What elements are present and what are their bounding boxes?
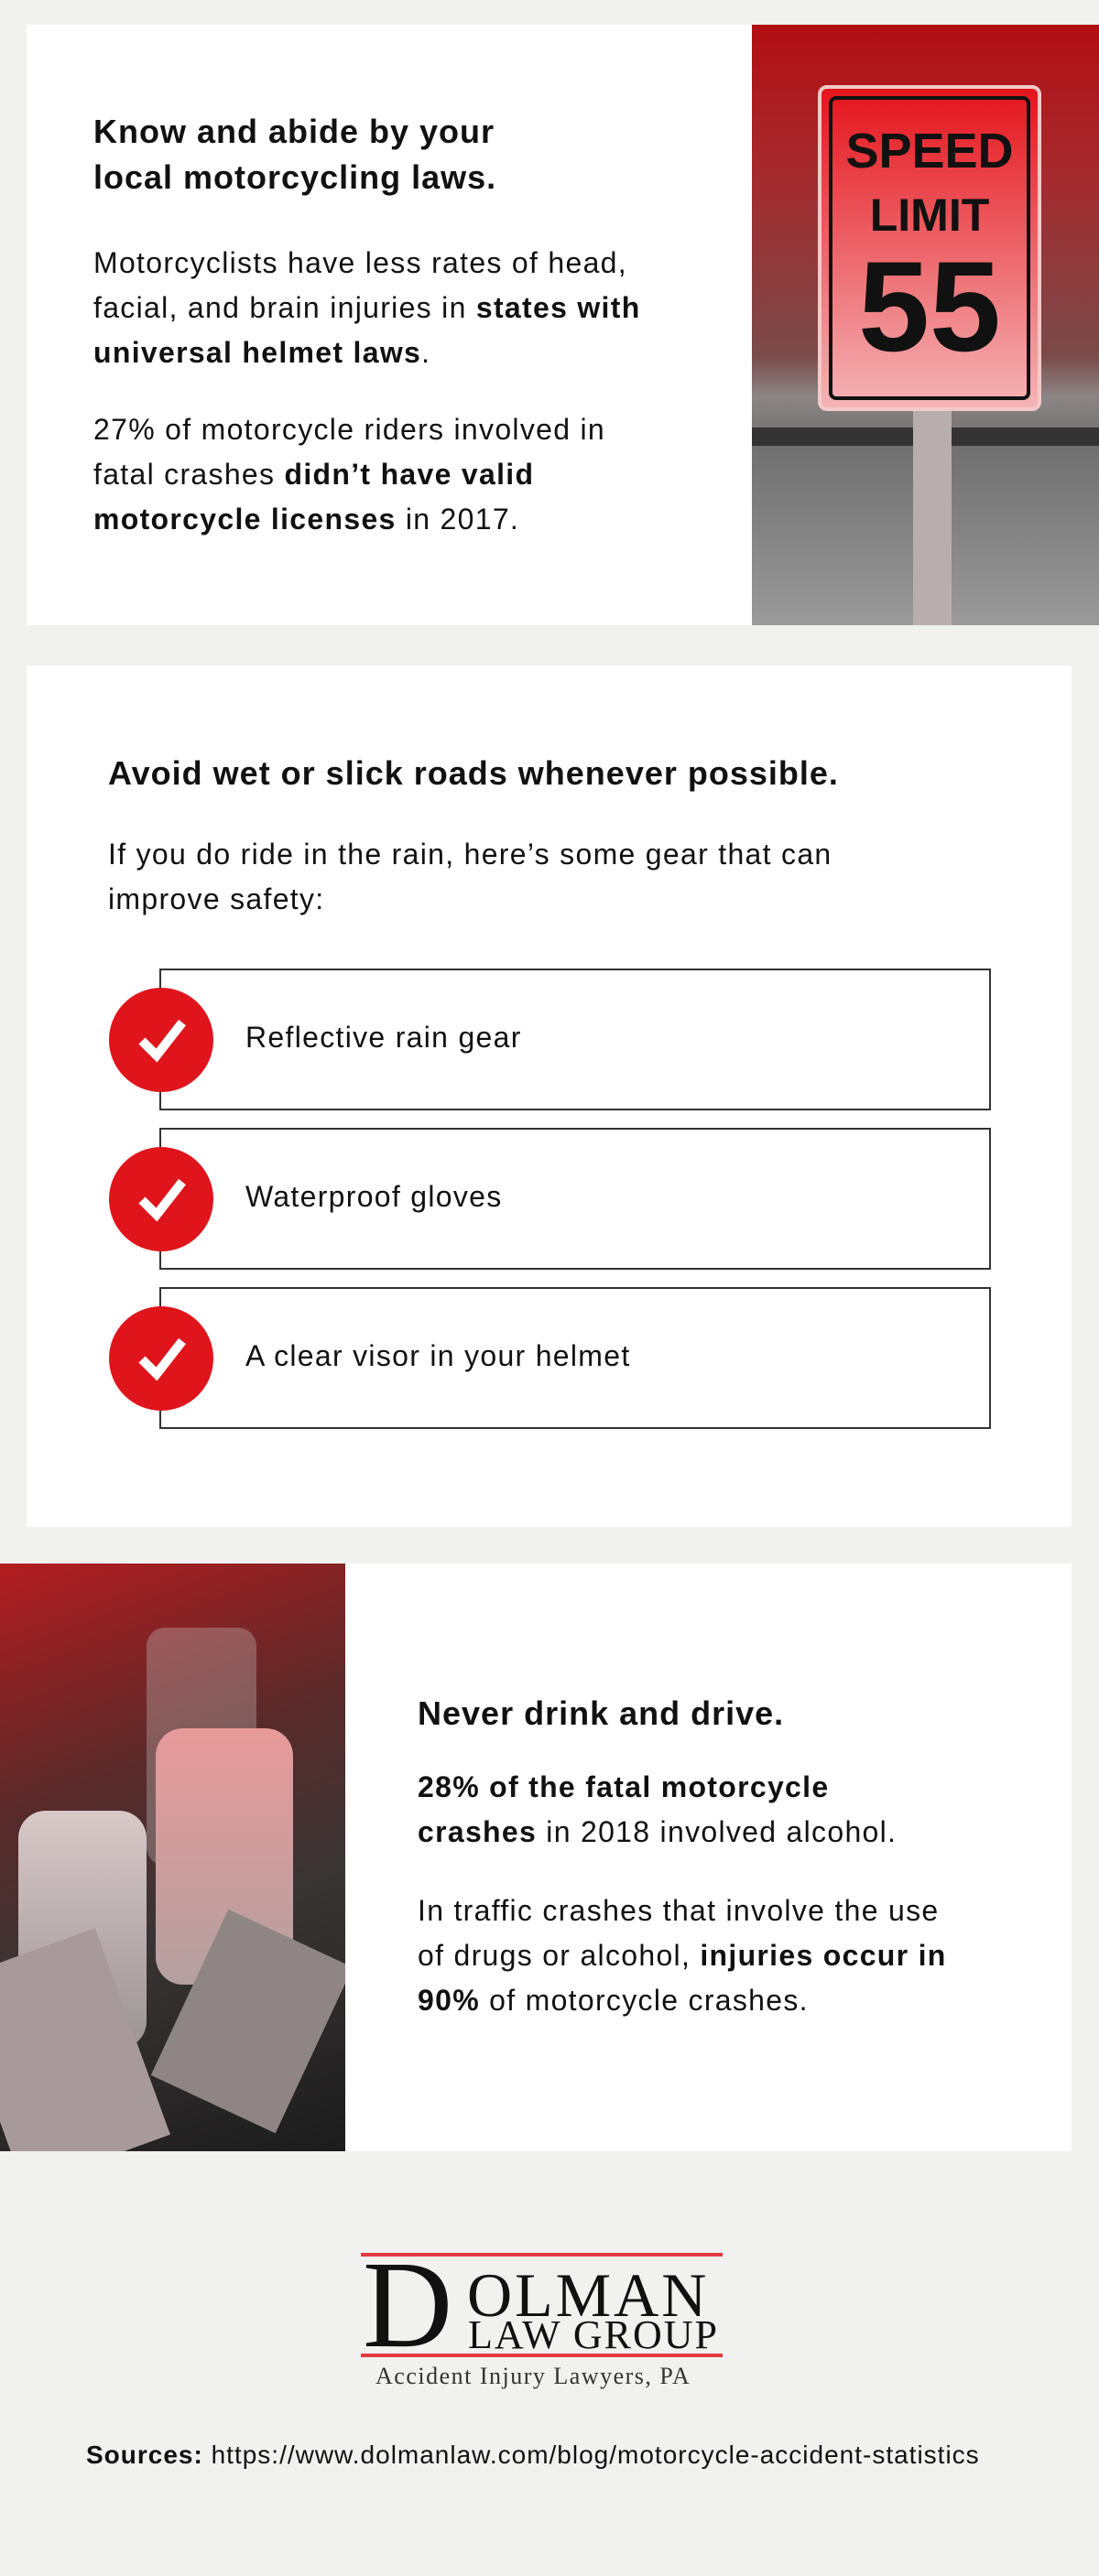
text: rain gear intro: If you do ride in the rain, here’s some gear that can [108,838,832,871]
icon: check 3 [109,1306,213,1411]
panel: drink and drive [0,1564,1072,2151]
image: speed limit sign [752,25,1099,625]
text: helmet laws: universal helmet laws. [93,336,430,369]
item: reflective rain gear: Reflective rain gear [245,1021,522,1054]
panel: local laws [27,25,1099,625]
image: speed limit sign: 55 [858,234,1001,378]
icon: check 1 [109,988,213,1092]
item: clear visor: A clear visor in your helmet [245,1339,631,1372]
heading: know laws: Know and abide by your [93,113,495,150]
text: licenses: fatal crashes didn’t have valid [93,458,534,491]
item: clear visor [159,1287,991,1429]
text: helmet laws: Motorcyclists have less rates of head, [93,246,627,279]
heading: avoid wet roads: Avoid wet or slick roads whenever possible. [108,754,839,792]
image: drinks toast [0,1564,345,2151]
text: 28% alcohol: 28% of the fatal motorcycle [418,1770,829,1803]
logo: Dolman Law Group: OLMAN [467,2260,709,2330]
item: waterproof gloves: Waterproof gloves [245,1180,503,1213]
sources: Sources: https://www.dolmanlaw.com/blog/motorcycle-accident-statistics [86,2441,980,2469]
heading: know laws: local motorcycling laws. [93,158,496,196]
text: 28% alcohol: crashes in 2018 involved alcohol. [418,1815,897,1848]
icon: check 2 [109,1147,213,1251]
text: licenses [93,413,605,536]
text: 90% injuries: In traffic crashes that involve the use [418,1894,940,1927]
text: rain gear intro [108,838,832,915]
text: helmet laws: facial, and brain injuries in states with [93,291,641,324]
heading: never drink: Never drink and drive. [418,1694,784,1732]
text: licenses: motorcycle licenses in 2017. [93,503,519,536]
text: 90% injuries [418,1894,947,2017]
item: waterproof gloves [159,1128,991,1270]
text: 28% alcohol [418,1770,897,1848]
text: helmet laws [93,246,641,369]
item: reflective rain gear [159,969,991,1110]
logo: Dolman Law Group: LAW GROUP [468,2312,719,2357]
text: licenses: 27% of motorcycle riders involved in [93,413,605,446]
text: rain gear intro: improve safety: [108,882,324,915]
image: speed limit sign: LIMIT [870,189,989,241]
panel: wet roads [27,666,1072,1527]
logo: Dolman Law Group: D [363,2236,452,2374]
logo: Dolman Law Group: Accident Injury Lawyers, PA [375,2363,691,2389]
logo: Dolman Law Group [361,2236,723,2389]
heading: know laws [93,113,496,196]
text: 90% injuries: 90% of motorcycle crashes. [418,1984,809,2017]
image: speed limit sign: SPEED [845,124,1014,179]
text: 90% injuries: of drugs or alcohol, injuries occur in [418,1939,947,1972]
